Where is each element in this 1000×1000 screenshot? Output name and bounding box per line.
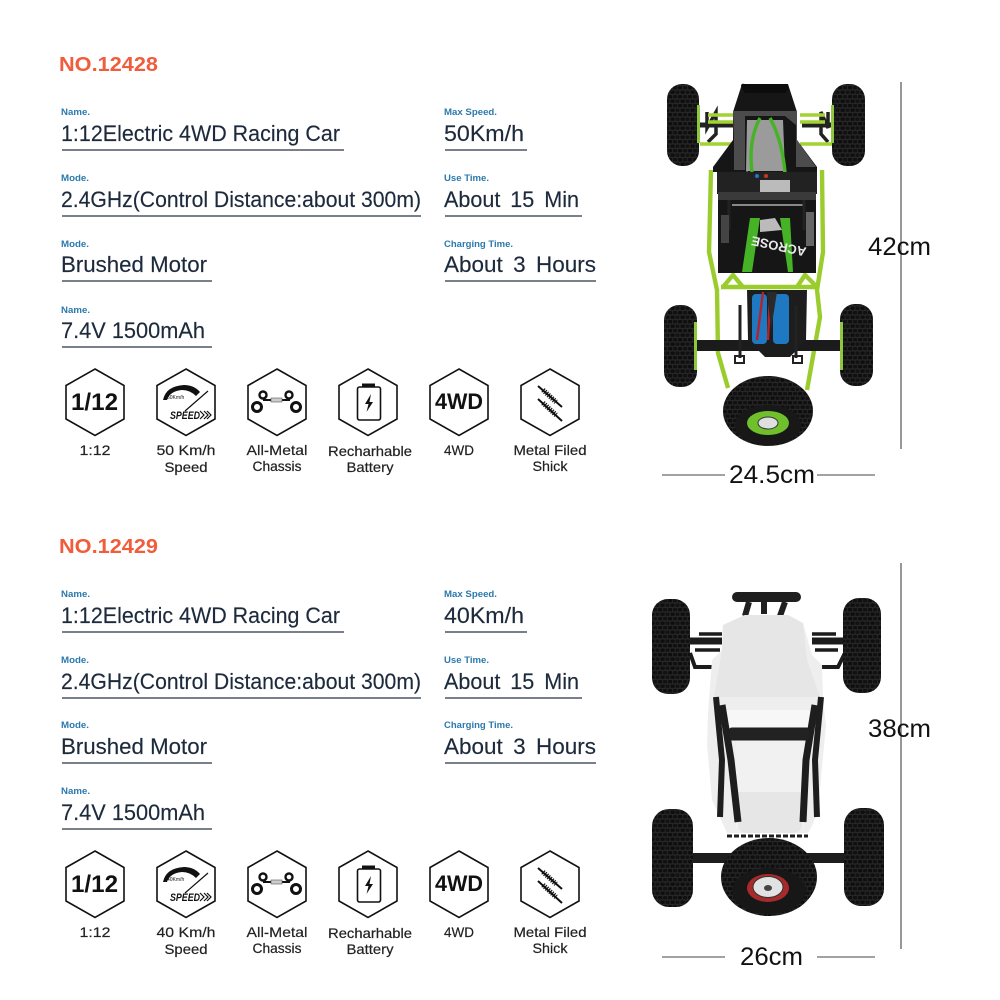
dimension: height 38cm: 38cm	[868, 715, 931, 743]
spec: use time: Use Time.	[444, 655, 489, 665]
icon: all-metal chassis: Chassis	[252, 940, 302, 956]
spec: max speed	[444, 589, 527, 632]
mid chassis	[717, 172, 817, 194]
spec: charging time	[444, 239, 596, 281]
spec: mode control distance	[61, 173, 421, 216]
spec: name: Name.	[61, 589, 90, 599]
spec: max speed: Max Speed.	[444, 107, 497, 117]
suspension arms	[688, 634, 846, 667]
icon: speed 40 km/h	[156, 851, 216, 957]
spec: use time: About 15 Min	[444, 669, 579, 694]
product photo: green buggy 12428 top view	[664, 84, 873, 446]
icon: metal filled shock	[514, 851, 586, 956]
battery box with ACROSE logo	[718, 192, 816, 273]
rear axle	[690, 853, 850, 863]
spec: battery	[61, 786, 212, 829]
rear axle	[695, 290, 845, 363]
icon: rechargeable battery: Battery	[346, 941, 394, 957]
icon: speed 40 km/h: SPEED	[170, 892, 200, 904]
spec: motor: Brushed Motor	[61, 252, 207, 277]
black roll bars	[716, 697, 821, 822]
panel: model 12429 specifications	[59, 536, 596, 829]
icon: 4WD: 4WD	[435, 871, 483, 896]
icon: speed 40 km/h: 40 Km/h	[156, 924, 216, 940]
spec: name: 1:12Electric 4WD Racing Car	[61, 121, 340, 146]
battery box with ACROSE logo: ACROSE	[750, 233, 807, 259]
icon: metal filled shock: Metal Filed	[514, 442, 586, 458]
spec: max speed: 50Km/h	[444, 121, 524, 146]
icon: rechargeable battery: Recharhable	[328, 443, 412, 459]
spare tire with red hub	[721, 836, 817, 916]
spec: charging time: Charging Time.	[444, 239, 513, 249]
spec: motor: Brushed Motor	[61, 734, 207, 759]
spec: mode control distance: 2.4GHz(Control Distance:about 300m)	[61, 187, 421, 212]
spec: mode control distance: 2.4GHz(Control Distance:about 300m)	[61, 669, 421, 694]
icon: scale 1/12: 1:12	[80, 442, 111, 458]
icon row: model 12429 features	[66, 851, 586, 957]
icon: speed 50 km/h: 50Km/h	[167, 395, 184, 401]
icon: metal filled shock	[514, 369, 586, 474]
panel: model 12428 specifications	[59, 54, 596, 347]
front tires	[667, 84, 865, 166]
model number 12428: NO.12428	[59, 54, 158, 76]
dimension: width 24.5cm: 24.5cm	[729, 461, 815, 489]
spec: battery: 7.4V 1500mAh	[61, 318, 205, 343]
icon: 4WD: 4WD	[435, 389, 483, 414]
spec: name	[61, 589, 344, 632]
front body shell	[713, 84, 817, 192]
dimension: width 26cm: 26cm	[740, 943, 803, 971]
spec: charging time: Charging Time.	[444, 720, 513, 730]
spec: motor: Mode.	[61, 720, 89, 730]
spec: charging time: About 3 Hours	[444, 252, 596, 277]
spec: max speed: Max Speed.	[444, 589, 497, 599]
spec: max speed	[444, 107, 527, 150]
spec: max speed: 40Km/h	[444, 603, 524, 628]
icon row: model 12428 features	[66, 369, 586, 475]
icon: speed 40 km/h: 40Km/h	[167, 877, 184, 883]
spec: use time: About 15 Min	[444, 187, 579, 212]
icon: speed 50 km/h: SPEED	[170, 410, 200, 422]
icon: metal filled shock: Metal Filed	[514, 924, 586, 940]
spec: use time	[444, 655, 582, 698]
spec: mode control distance: Mode.	[61, 655, 89, 665]
icon: rechargeable battery	[328, 851, 412, 957]
white body shell	[707, 615, 826, 833]
icon: 4WD	[430, 851, 488, 940]
spec: battery: Name.	[61, 305, 90, 315]
icon: rechargeable battery: Recharhable	[328, 925, 412, 941]
front bumper bar	[737, 597, 796, 616]
icon: metal filled shock: Shick	[532, 940, 569, 956]
spec: motor: Mode.	[61, 239, 89, 249]
icon: scale 1/12: 1:12	[80, 924, 111, 940]
icon: scale 1/12	[66, 851, 124, 940]
icon: all-metal chassis: All-Metal	[246, 442, 308, 458]
icon: all-metal chassis	[246, 369, 308, 474]
icon: speed 50 km/h: 50 Km/h	[156, 442, 216, 458]
spec: charging time: About 3 Hours	[444, 734, 596, 759]
spare tire with green hub	[723, 376, 813, 446]
icon: metal filled shock: Shick	[532, 458, 569, 474]
icon: rechargeable battery: Battery	[346, 459, 394, 475]
spec: use time: Use Time.	[444, 173, 489, 183]
front tires	[652, 598, 881, 694]
spec: battery: Name.	[61, 786, 90, 796]
model number 12429: NO.12429	[59, 536, 158, 558]
icon: 4WD: 4WD	[444, 924, 474, 940]
spec: name: Name.	[61, 107, 90, 117]
icon: scale 1/12	[66, 369, 124, 458]
rear tires	[664, 304, 873, 387]
spec: mode control distance	[61, 655, 421, 698]
spec: battery	[61, 305, 212, 347]
product photo: white buggy 12429 top view	[652, 597, 884, 916]
spec: charging time	[444, 720, 596, 763]
icon: scale 1/12: 1/12	[71, 871, 118, 898]
icon: 4WD: 4WD	[444, 442, 474, 458]
front arms	[697, 112, 832, 142]
spec: motor	[61, 720, 212, 763]
icon: rechargeable battery	[328, 369, 412, 475]
spec: mode control distance: Mode.	[61, 173, 89, 183]
icon: 4WD	[430, 369, 488, 458]
dimension: height 42cm: 42cm	[868, 233, 931, 261]
roll cage rear section	[709, 170, 823, 390]
spec: name	[61, 107, 344, 150]
icon: speed 50 km/h: Speed	[164, 459, 208, 475]
icon: speed 50 km/h	[156, 369, 216, 475]
icon: all-metal chassis: All-Metal	[246, 924, 308, 940]
rear tires	[652, 808, 884, 907]
spec: motor	[61, 239, 212, 281]
icon: speed 40 km/h: Speed	[164, 941, 208, 957]
spec: name: 1:12Electric 4WD Racing Car	[61, 603, 340, 628]
spec: battery: 7.4V 1500mAh	[61, 800, 205, 825]
icon: all-metal chassis	[246, 851, 308, 956]
icon: all-metal chassis: Chassis	[252, 458, 302, 474]
spec: use time	[444, 173, 582, 216]
icon: scale 1/12: 1/12	[71, 389, 118, 416]
